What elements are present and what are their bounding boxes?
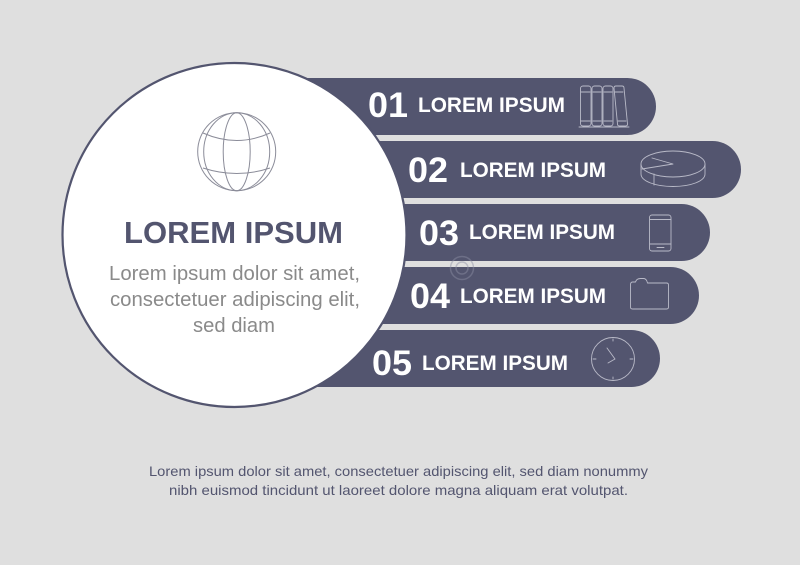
label 3: LOREM IPSUM <box>469 221 615 244</box>
footer text <box>149 463 648 498</box>
number 05: 05 <box>372 344 412 383</box>
icon: clock <box>592 338 634 380</box>
bar 2 <box>300 141 741 198</box>
number 03: 03 <box>419 214 459 253</box>
bar 1 <box>250 78 656 135</box>
circle text <box>109 263 360 337</box>
footer text: Lorem ipsum dolor sit amet, consectetuer adipiscing elit, sed diam nonummy <box>149 463 648 479</box>
bar 4 <box>300 267 699 324</box>
circle text: Lorem ipsum dolor sit amet, <box>109 263 360 285</box>
bar 5 <box>250 330 660 387</box>
icon: books <box>579 86 629 127</box>
icon: pie chart <box>641 151 705 186</box>
circle heading: LOREM IPSUM <box>124 215 343 250</box>
label 1: LOREM IPSUM <box>418 94 565 117</box>
central circle <box>62 63 406 407</box>
circle text: consectetuer adipiscing elit, <box>110 289 360 311</box>
footer text: nibh euismod tincidunt ut laoreet dolore magna aliquam erat volutpat. <box>169 482 628 498</box>
label 2: LOREM IPSUM <box>460 159 606 182</box>
label 5: LOREM IPSUM <box>422 352 568 375</box>
icon: folder <box>630 278 668 309</box>
circle text: sed diam <box>193 315 275 337</box>
icon: globe <box>198 113 276 191</box>
icon: phone <box>650 215 671 251</box>
number 01: 01 <box>368 86 408 125</box>
number 02: 02 <box>408 151 448 190</box>
number 04: 04 <box>410 277 451 316</box>
watermark spiral <box>450 256 474 280</box>
label 4: LOREM IPSUM <box>460 285 606 308</box>
bar 3 <box>300 204 710 261</box>
